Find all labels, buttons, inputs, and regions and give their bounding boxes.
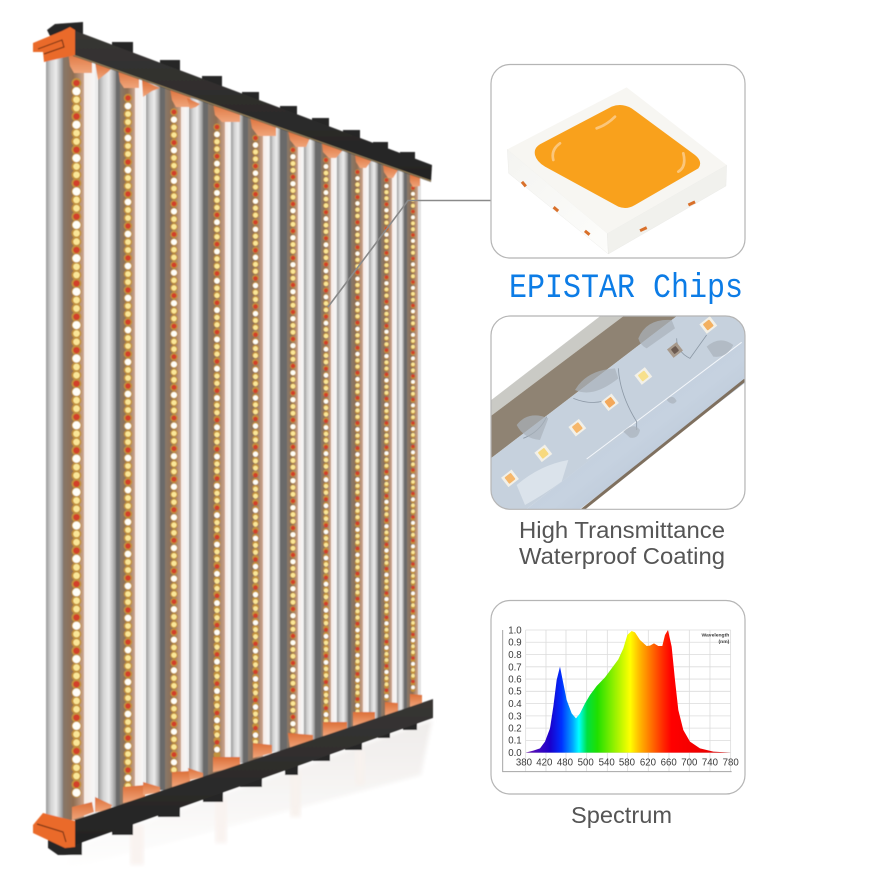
bar 5 — [231, 98, 270, 763]
legend: wavelength: Wavelength — [702, 632, 729, 638]
floor reflection — [60, 720, 432, 872]
x axis labels: 740 — [702, 758, 718, 769]
LED board — [490, 315, 747, 512]
spectrum chart — [503, 625, 739, 772]
x axis labels: 580 — [619, 758, 635, 769]
y axis labels: 1.0 — [508, 625, 522, 636]
bar 6 — [270, 110, 304, 752]
x axis labels: 380 — [516, 758, 532, 769]
bar 8 — [337, 132, 369, 732]
heading: EPISTAR Chips: EPISTAR Chips — [509, 270, 743, 308]
bar 9 — [369, 140, 397, 722]
x axis labels: 700 — [681, 758, 697, 769]
lower metal band — [523, 338, 747, 512]
x axis labels: 540 — [599, 758, 615, 769]
y axis labels: 0.1 — [508, 736, 522, 747]
panel: spectrum chart — [491, 600, 745, 794]
bottom mounting nubs — [48, 718, 417, 855]
top mounting nubs — [47, 22, 415, 163]
icon: LED chip — [507, 87, 727, 254]
caption: spectrum: Spectrum — [571, 802, 672, 828]
bar 4 — [189, 87, 231, 777]
bar 2 — [98, 58, 145, 807]
panel: waterproof coating — [490, 315, 747, 512]
caption: coating line 2: Waterproof Coating — [519, 543, 725, 569]
water droplets — [517, 320, 733, 440]
y axis labels: 0.3 — [508, 711, 522, 722]
callout lines — [328, 200, 491, 307]
silver edge — [490, 315, 625, 417]
bar 7 — [304, 120, 337, 742]
bar 10 — [397, 148, 421, 713]
y axis labels: 0.5 — [508, 687, 522, 698]
x axis labels: 620 — [640, 758, 656, 769]
bar columns — [46, 43, 421, 820]
top black rail — [73, 30, 432, 182]
bar 1 — [46, 43, 97, 820]
x axis labels: 480 — [557, 758, 573, 769]
brown reflection band — [490, 315, 678, 459]
y axis labels — [508, 625, 522, 759]
spectrum curve — [526, 630, 731, 753]
x axis labels: 500 — [578, 758, 594, 769]
pale coating pool — [517, 460, 568, 505]
panel: EPISTAR chip — [491, 64, 745, 258]
y axis labels: 0.6 — [508, 674, 522, 685]
bottom bar end caps — [72, 694, 422, 820]
y axis labels: 0.7 — [508, 662, 522, 673]
bottom orange corner — [33, 813, 75, 848]
y axis labels: 0.4 — [508, 699, 522, 710]
x axis labels — [516, 758, 739, 769]
light fixture — [33, 22, 433, 872]
bar 3 — [146, 72, 188, 790]
y axis labels: 0.0 — [508, 748, 522, 759]
y axis labels: 0.9 — [508, 638, 522, 649]
x axis labels: 420 — [536, 758, 552, 769]
bottom black rail — [75, 699, 433, 845]
x axis labels: 660 — [661, 758, 677, 769]
top orange corner — [33, 27, 75, 62]
y axis labels: 0.2 — [508, 724, 522, 735]
SMD LEDs — [501, 316, 717, 487]
legend: wavelength — [702, 632, 730, 645]
coating ripple lines — [523, 335, 707, 438]
top bar end caps — [68, 50, 420, 187]
x axis labels: 780 — [723, 758, 739, 769]
caption: coating line 1: High Transmittance — [519, 517, 725, 543]
legend: wavelength: (nm) — [719, 639, 730, 645]
y axis labels: 0.8 — [508, 650, 522, 661]
